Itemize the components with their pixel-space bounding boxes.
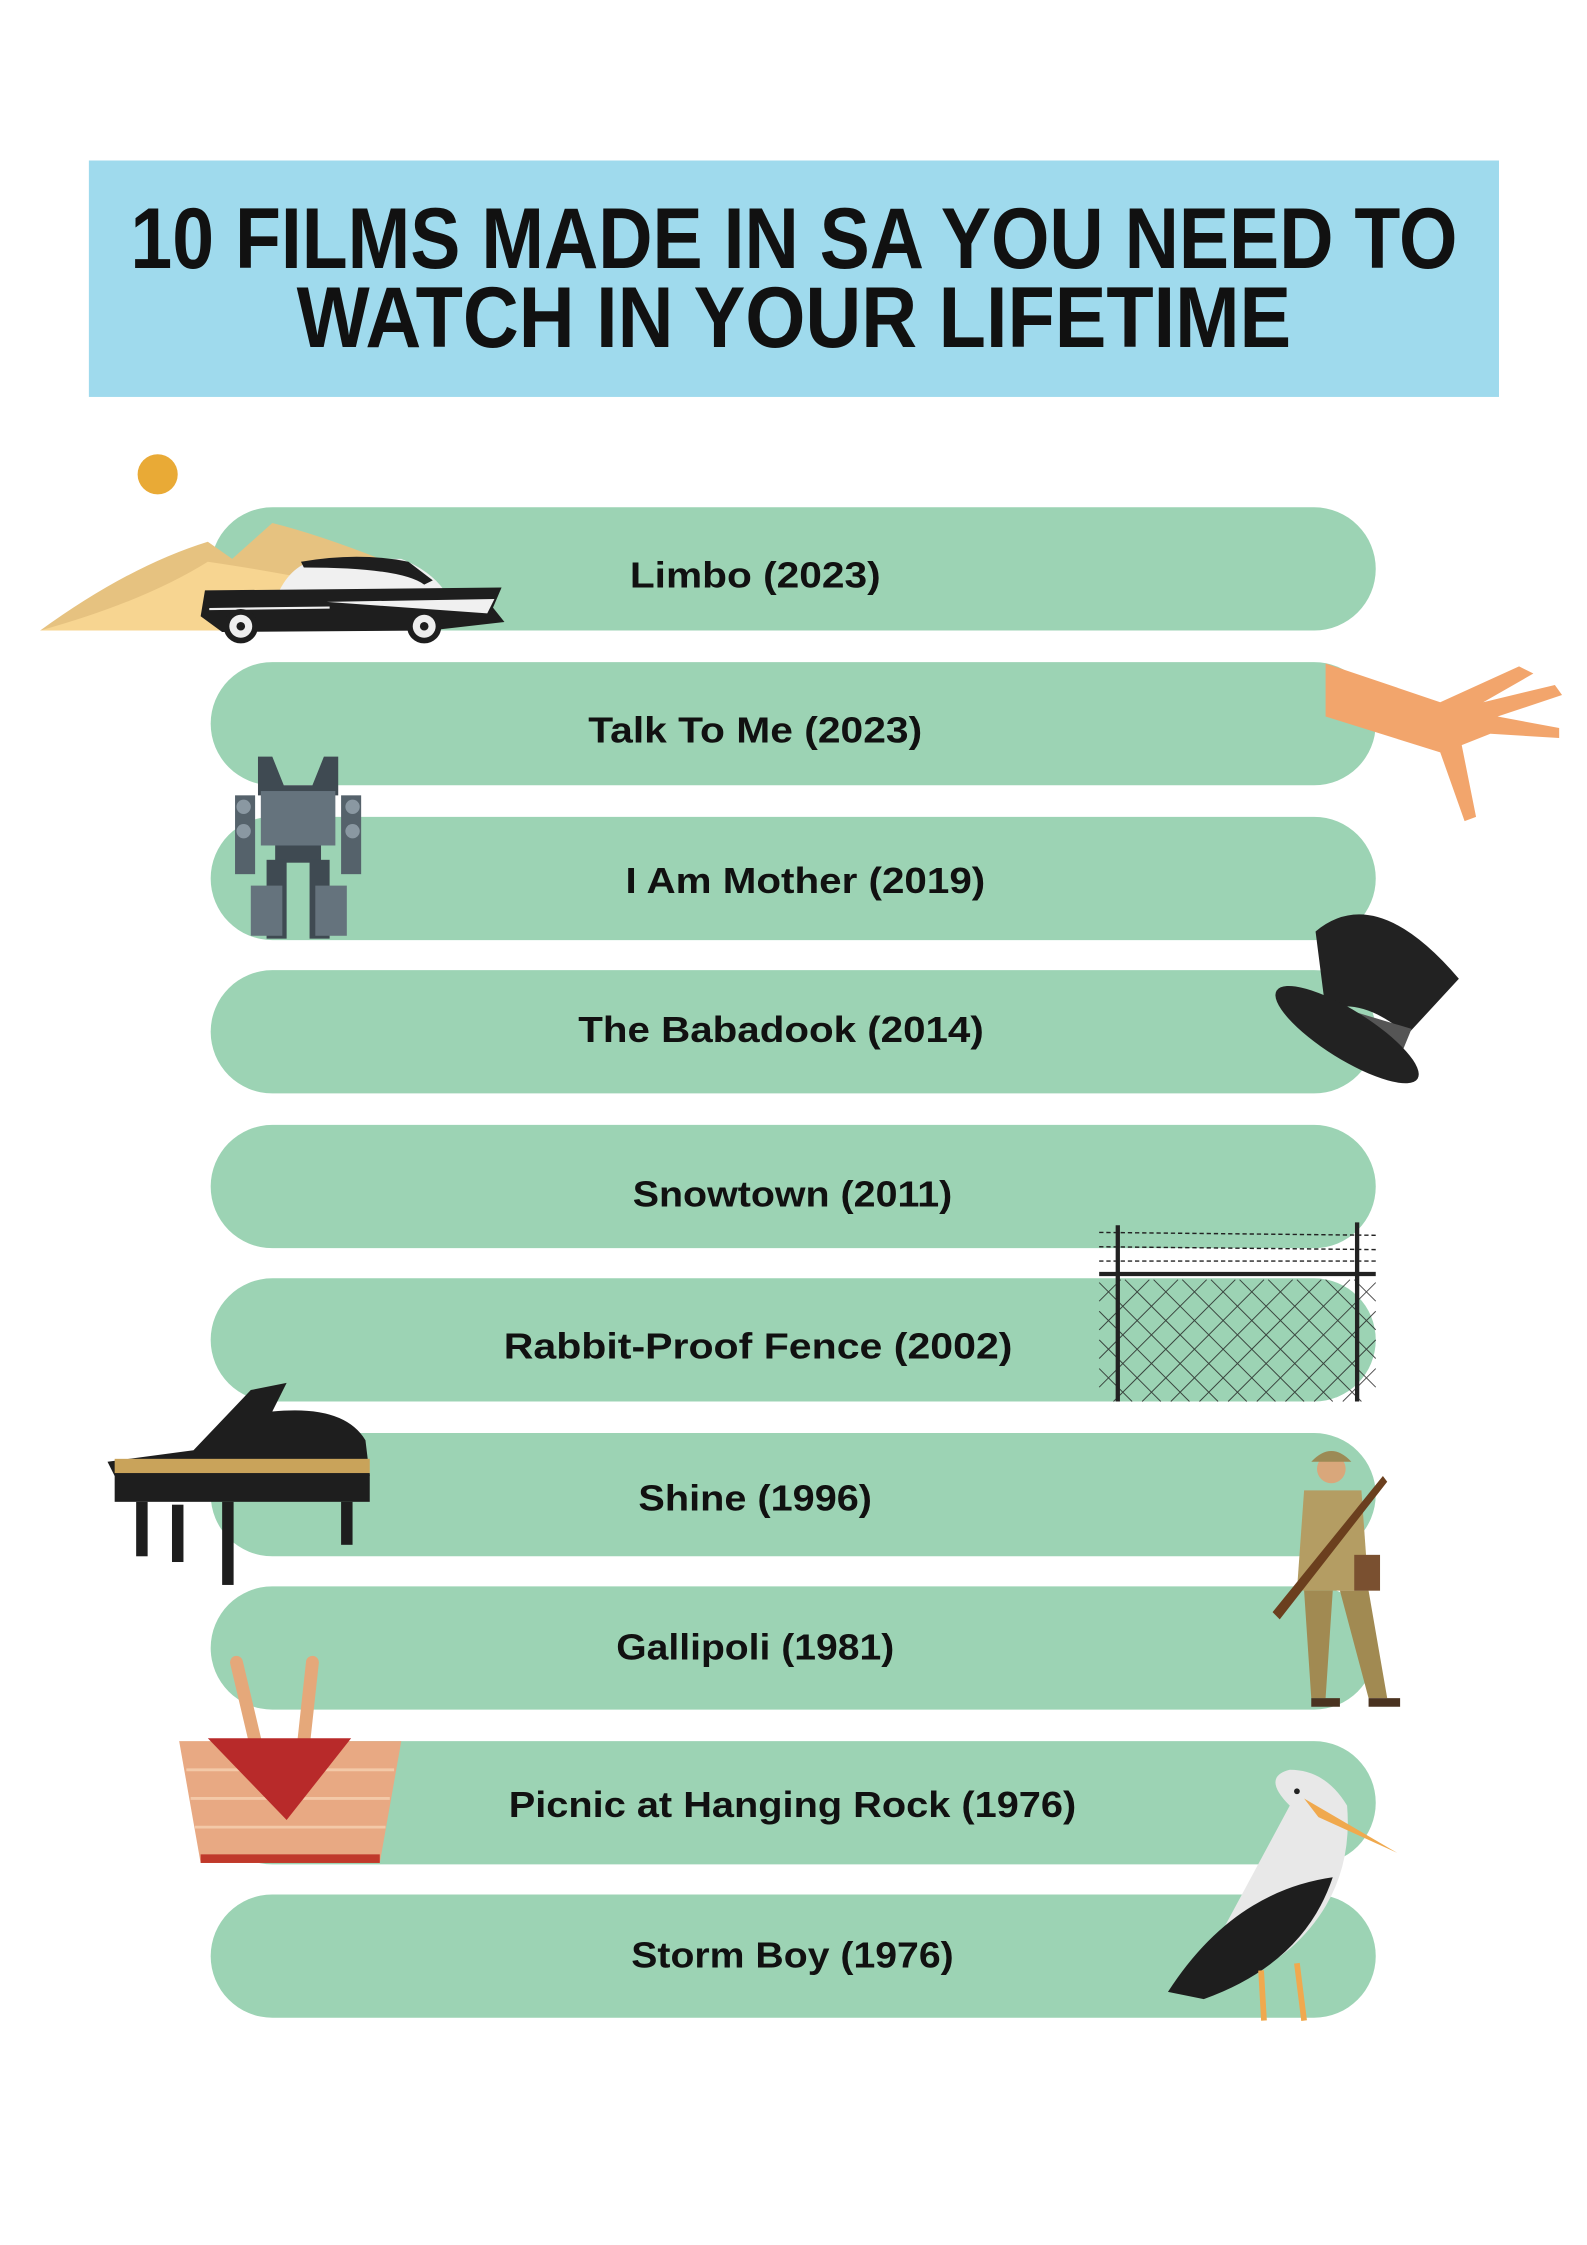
icon: picnic basket <box>179 1662 401 1863</box>
icon: fence <box>1099 1222 1376 1402</box>
icon: piano <box>108 1383 370 1585</box>
pill: I Am Mother: I Am Mother (2019) <box>626 861 985 901</box>
pill: Storm Boy: Storm Boy (1976) <box>631 1936 954 1976</box>
icon: robot <box>235 757 361 939</box>
icon: pelican <box>1168 1770 1397 2021</box>
pill: The Babadook <box>211 970 1376 1093</box>
pill: Shine <box>211 1433 1376 1556</box>
icon: sun <box>138 454 178 494</box>
pill: Storm Boy <box>211 1894 1376 2018</box>
pill: Limbo: Limbo (2023) <box>630 556 881 596</box>
pill: Limbo <box>211 507 1376 631</box>
pill: I Am Mother <box>211 817 1376 940</box>
pill: The Babadook: The Babadook (2014) <box>578 1010 984 1050</box>
pill: Gallipoli: Gallipoli (1981) <box>616 1627 894 1667</box>
title banner <box>89 161 1499 397</box>
icon: desert and car <box>40 523 504 643</box>
icon: hand <box>1326 663 1562 821</box>
pill: Talk To Me: Talk To Me (2023) <box>588 710 922 750</box>
pill: Picnic at Hanging Rock <box>211 1741 1376 1864</box>
pill: Rabbit-Proof Fence: Rabbit-Proof Fence (2002) <box>504 1327 1012 1367</box>
pill: Picnic at Hanging Rock: Picnic at Hanging Rock (1976) <box>509 1785 1076 1825</box>
pill: Shine: Shine (1996) <box>638 1478 872 1518</box>
pill: Snowtown <box>211 1125 1376 1248</box>
pill: Talk To Me <box>211 662 1376 785</box>
list of films <box>211 507 1376 2018</box>
title text <box>130 191 1457 366</box>
title text: WATCH IN YOUR LIFETIME <box>297 270 1291 366</box>
icon: soldier <box>1273 1451 1400 1707</box>
pill: Rabbit-Proof Fence <box>211 1278 1376 1402</box>
icon: top hat <box>1264 914 1459 1099</box>
pill: Gallipoli <box>211 1586 1376 1710</box>
pill: Snowtown: Snowtown (2011) <box>633 1175 952 1215</box>
